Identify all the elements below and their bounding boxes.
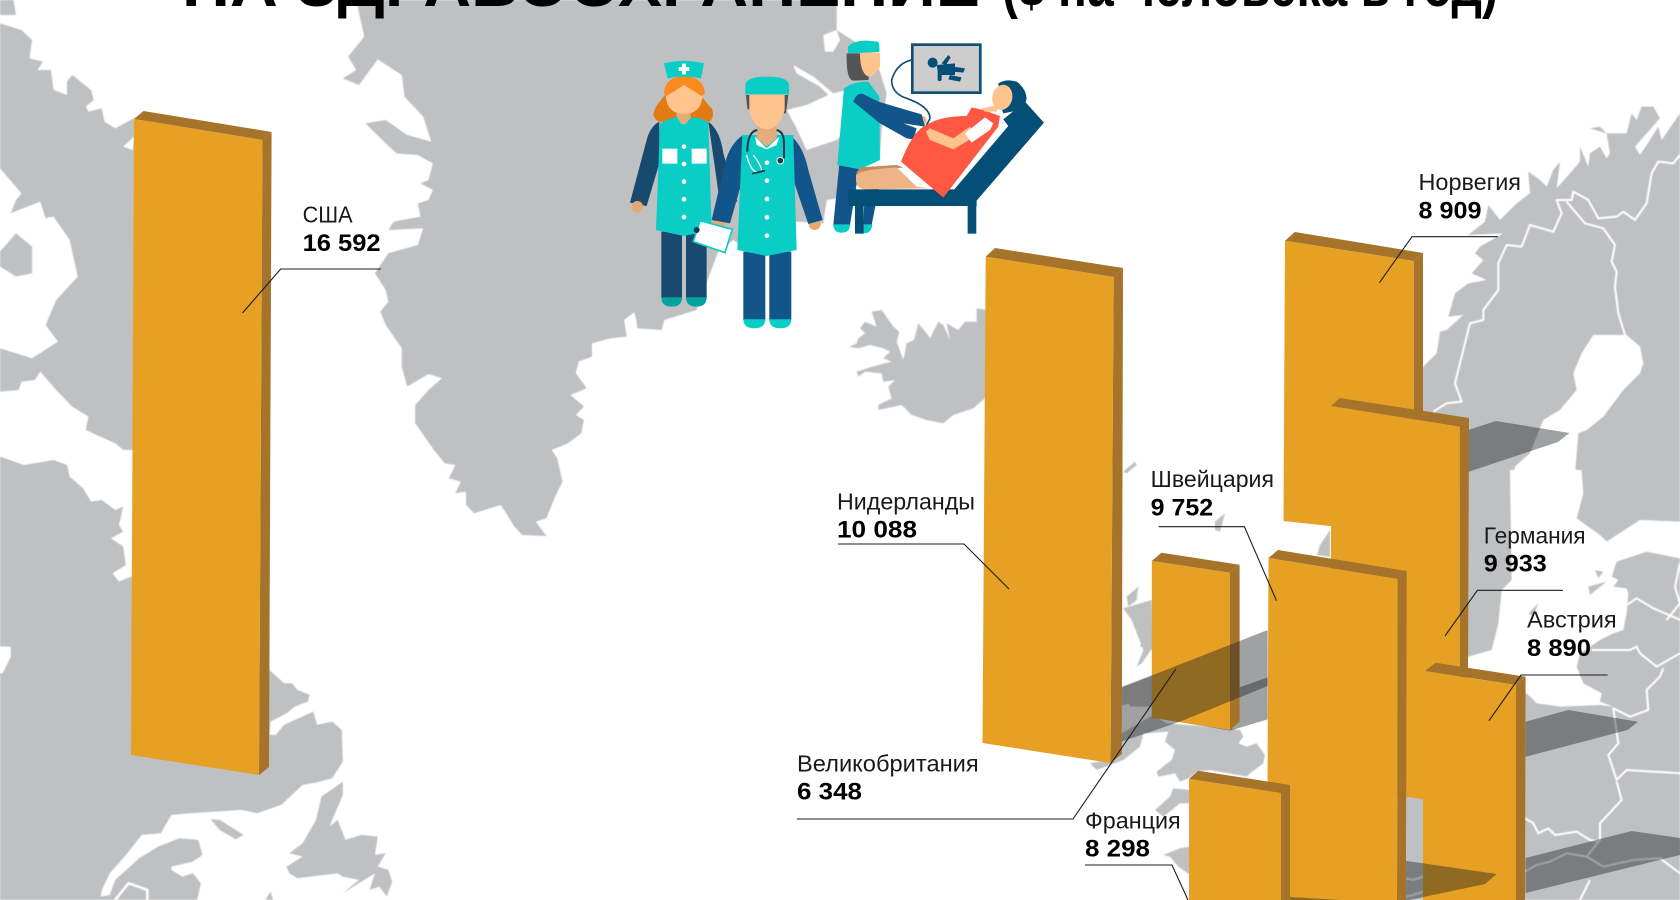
- icon: clipboard: [693, 221, 732, 253]
- label: Франция: [1085, 807, 1188, 900]
- label: Норвегия: 8 909: [1418, 198, 1482, 224]
- label: Германия: [1445, 522, 1586, 636]
- label: Великобритания: Великобритания: [797, 751, 979, 777]
- bar: Нидерланды: [982, 248, 1123, 763]
- label: Норвегия: [1379, 169, 1521, 283]
- bar: Франция: [1189, 771, 1290, 900]
- label: Великобритания: 6 348: [797, 778, 862, 805]
- bar: Швейцария: [1267, 550, 1407, 900]
- shadow: Норвегия: [1465, 421, 1570, 473]
- shadow: UK bar base: [1177, 677, 1268, 731]
- label: Германия: 9 933: [1484, 551, 1547, 578]
- map: east Greenland: [620, 0, 887, 323]
- label: Швейцария: 9 752: [1151, 495, 1213, 522]
- icon: patient on examination bed: [848, 80, 1044, 234]
- map: British Isles and Brittany: [1090, 600, 1265, 875]
- map: Baltic and continental Europe: [1406, 470, 1680, 900]
- label: США: [242, 202, 381, 313]
- label: Франция: Франция: [1085, 807, 1181, 833]
- shadow: band across UK bar: [1122, 630, 1268, 742]
- label: Нидерланды: [837, 488, 1009, 589]
- bar: США: [131, 111, 272, 775]
- shadow: Швейцария on Австрия: [1400, 860, 1497, 900]
- label: США: США: [303, 202, 353, 228]
- label: Швейцария: [1151, 466, 1276, 601]
- label: Норвегия: Норвегия: [1418, 169, 1521, 195]
- label: Германия: Германия: [1484, 522, 1586, 548]
- icon: ultrasound monitor with baby: [892, 45, 980, 128]
- map: Scandinavia: [1420, 107, 1680, 493]
- bar: Великобритания: [1152, 553, 1240, 730]
- label: США: 16 592: [303, 230, 381, 257]
- label: Великобритания: [797, 669, 1176, 819]
- label: Нидерланды: Нидерланды: [837, 488, 975, 514]
- icon: nurse: [630, 61, 737, 307]
- map: small northern islands: [1123, 462, 1225, 650]
- label: Австрия: 8 890: [1527, 635, 1591, 662]
- map: Canada and Greenland: [0, 0, 750, 900]
- shadow: Австрия: [1526, 710, 1638, 757]
- icon: doctor with stethoscope: [712, 77, 823, 328]
- bar: Австрия: [1423, 663, 1526, 900]
- shadow: Франция: [1290, 897, 1340, 900]
- label: Швейцария: Швейцария: [1151, 466, 1274, 492]
- bar: Германия: [1331, 398, 1469, 805]
- bar: Норвегия: [1284, 232, 1423, 535]
- label: Австрия: [1489, 607, 1617, 721]
- title: [182, 0, 1498, 20]
- label: Австрия: Австрия: [1527, 607, 1617, 633]
- shadow: lower right: [1526, 831, 1680, 893]
- map: Iceland: [849, 308, 987, 423]
- label: Франция: 8 298: [1085, 836, 1150, 863]
- illustration: medical staff and patient: [630, 41, 1044, 328]
- label: Нидерланды: 10 088: [837, 517, 917, 544]
- icon: sonographer: [833, 41, 927, 233]
